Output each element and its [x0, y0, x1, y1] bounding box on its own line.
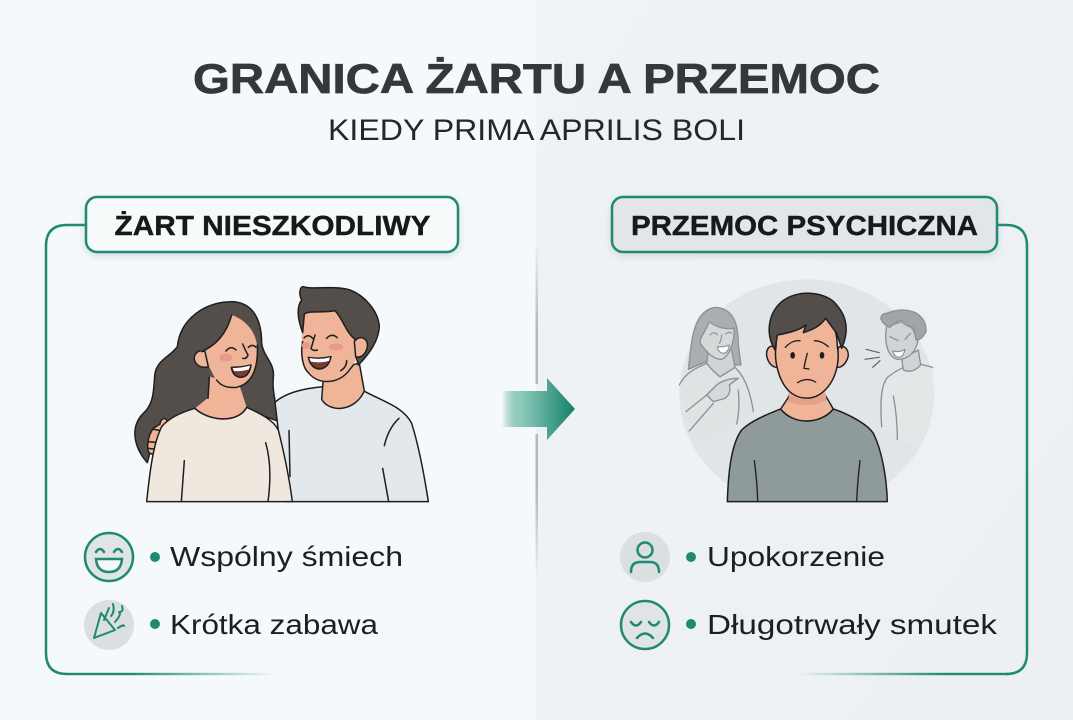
item: long-lasting sadness [621, 601, 997, 649]
woman eyes and nose [226, 344, 256, 359]
man eyes and nose [304, 335, 337, 350]
man sweater [275, 387, 428, 502]
icon: sad face [621, 601, 669, 649]
sad man hair [769, 293, 846, 350]
item: brief fun: Krótka zabawa [170, 609, 379, 640]
item: humiliation: Upokorzenie [707, 541, 885, 572]
item: shared laughter [85, 533, 403, 581]
item: long-lasting sadness: Długotrwały smutek [707, 609, 997, 640]
icon: person [620, 532, 670, 582]
woman neck [195, 377, 247, 419]
man ear [354, 338, 367, 357]
title: GRANICA ŻARTU A PRZEMOC [193, 55, 880, 102]
sad man neck [781, 388, 833, 421]
icon: laughing face [85, 533, 133, 581]
illustration: laughing couple [135, 287, 428, 502]
mocking man [865, 310, 933, 447]
item: brief fun [84, 600, 379, 650]
sad man ears [767, 346, 848, 367]
item: humiliation [620, 532, 885, 582]
woman sweater [147, 407, 292, 502]
woman hair strand [192, 313, 232, 352]
sad man brows and eyes [785, 341, 828, 347]
sad man sweater [727, 409, 887, 502]
woman mouth [231, 365, 251, 377]
item: shared laughter: Wspólny śmiech [170, 541, 403, 572]
woman hair back [135, 302, 277, 463]
woman cheek [219, 354, 233, 362]
divider [536, 240, 538, 580]
icon: party popper [84, 600, 134, 650]
man face [302, 305, 359, 382]
sweater folds [181, 418, 399, 502]
background circle [680, 280, 934, 484]
man hair [298, 287, 379, 365]
woman ear [194, 351, 208, 367]
heading: harmless joke: ŻART NIESZKODLIWY [114, 210, 430, 241]
woman face [202, 315, 257, 387]
panel: harmless joke [46, 197, 458, 675]
sweater folds [754, 461, 860, 502]
sad man face [776, 310, 838, 398]
heading: psychological abuse: PRZEMOC PSYCHICZNA [631, 210, 978, 241]
heading: psychological abuse [612, 197, 997, 252]
arrow [502, 378, 575, 440]
illustration: sad man surrounded by mockers [679, 279, 934, 509]
neck shadow [788, 393, 827, 405]
hand on shoulder [148, 419, 169, 454]
man mouth [308, 357, 331, 369]
man neck [322, 363, 364, 408]
sad man nose and mouth [798, 353, 816, 383]
panel: psychological abuse [612, 197, 1027, 675]
heading: harmless joke [86, 197, 458, 252]
man cheeks [329, 343, 343, 351]
mocking woman [679, 307, 753, 443]
subtitle: KIEDY PRIMA APRILIS BOLI [328, 114, 745, 147]
